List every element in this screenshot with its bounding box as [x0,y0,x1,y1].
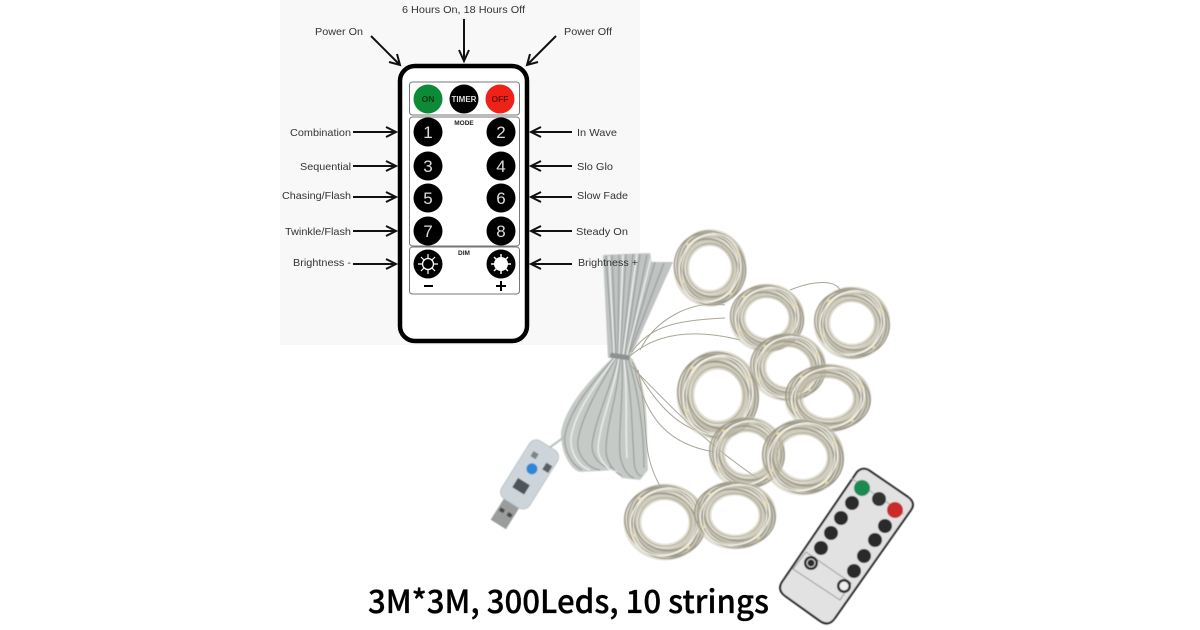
remote function labels: Chasing/Flash [282,190,351,202]
panel: remote diagram background [280,0,640,345]
mode button group: 1 [423,123,433,142]
dim button group: DIM [458,250,470,257]
power button group: TIMER [452,95,477,104]
remote function labels: In Wave [577,127,617,139]
power button group: OFF [492,94,508,104]
product photo: USB plug controller [484,424,570,533]
remote function labels: Slow Fade [577,190,628,202]
product photo: curtain light wire bundle [561,253,673,480]
dim button group [410,247,520,294]
mode button group: 7 [423,222,433,241]
remote control diagram [400,66,527,341]
remote function labels: Combination [290,127,351,139]
remote outline [400,66,527,341]
power button group: ON [422,94,434,104]
product photo: coiled LED light strings [612,221,901,569]
product photo: small handheld remote [780,469,913,623]
mode button group: 2 [496,123,506,142]
power button group [410,82,520,115]
remote function labels [282,4,638,269]
mode button group: MODE [454,120,474,127]
remote function labels: Twinkle/Flash [285,226,351,238]
remote function labels: Power Off [564,26,612,38]
remote function labels: Brightness + [578,257,638,269]
remote function labels: Power On [315,26,363,38]
remote function labels: Sequential [300,161,351,173]
mode button group: 5 [423,189,433,208]
mode button group: 4 [496,157,506,176]
remote function labels: 6 Hours On, 18 Hours Off [402,4,525,16]
remote function labels: Slo Glo [577,161,613,173]
mode button group: 6 [496,189,506,208]
mode button group: 8 [496,222,506,241]
mode button group: 3 [423,157,433,176]
remote function labels: Brightness - [293,257,352,269]
arrows pointing to remote buttons [353,19,572,269]
remote function labels: Steady On [576,226,628,238]
product photo: thin connecting wires [630,282,840,486]
caption: 3M*3M, 300Leds, 10 strings [368,577,769,623]
mode button group [410,117,520,246]
